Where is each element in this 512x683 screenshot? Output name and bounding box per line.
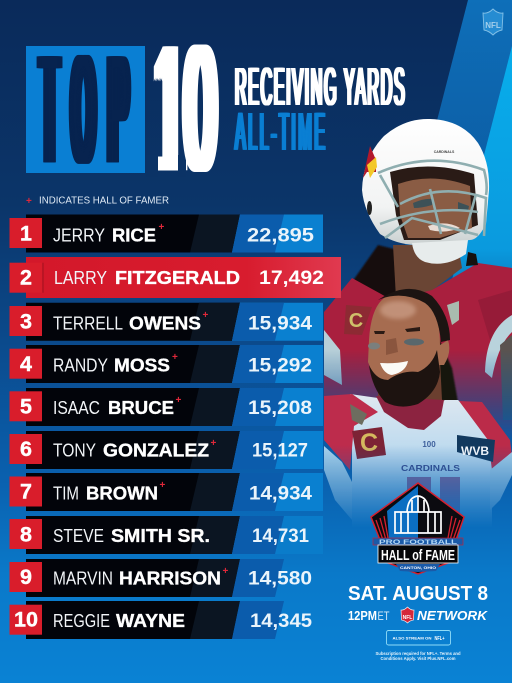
row 8: Steve Smith Sr.: SMITH SR.	[111, 525, 210, 546]
WVB patch	[457, 435, 495, 462]
hair right	[466, 252, 478, 266]
row 9: Marvin Harrison	[10, 559, 312, 597]
row 2: Larry Fitzgerald highlight: 17,492	[259, 268, 324, 289]
row 1: Jerry Rice: 1	[20, 222, 32, 246]
right sleeve	[485, 315, 512, 378]
heading: Receiving Yards: RECEIVING YARDS	[234, 57, 406, 117]
captain C patch	[352, 427, 386, 459]
row 5: Isaac Bruce: +	[176, 395, 182, 406]
jersey number	[407, 477, 460, 520]
row 8: Steve Smith Sr.: 8	[20, 522, 32, 546]
row 10: Reggie Wayne: 14,345	[250, 611, 312, 632]
logo building	[395, 496, 441, 533]
eye black	[413, 199, 433, 208]
shoulder patch	[350, 404, 367, 425]
row 1: Jerry Rice: +	[158, 222, 164, 233]
streaming badge: NFL+	[434, 636, 445, 642]
row 10: Reggie Wayne	[10, 601, 312, 639]
face	[368, 296, 450, 380]
helmet shell	[362, 119, 489, 245]
row 2: Larry Fitzgerald highlight: 2	[20, 266, 32, 290]
row 4: Randy Moss	[10, 345, 323, 383]
title box: TOP	[26, 46, 144, 173]
row 7: Tim Brown: TIM	[53, 482, 79, 503]
row 5: Isaac Bruce: ISAAC	[53, 397, 100, 418]
row 6: Tony Gonzalez: GONZALEZ	[103, 440, 209, 461]
disclaimer: Conditions Apply. Visit Plus.NFL.com	[380, 656, 456, 661]
captain C patch: C	[360, 429, 378, 457]
game time: 12PM	[348, 608, 377, 623]
icon: NFL shield: NFL	[485, 21, 501, 30]
row 1: Jerry Rice: 22,895	[247, 226, 314, 247]
row 5: Isaac Bruce: 5	[20, 394, 32, 418]
neck	[378, 365, 442, 400]
icon: NFL Network shield	[401, 607, 414, 623]
collar	[376, 396, 444, 430]
row 4: Randy Moss: +	[172, 352, 178, 363]
forehead highlight	[380, 301, 416, 319]
left sleeve	[324, 446, 352, 520]
icon: NFL Network shield: NFL	[403, 615, 412, 621]
logo: Pro Football Hall of Fame: PRO FOOTBALL	[379, 540, 458, 546]
hall of famer legend: +	[26, 196, 32, 207]
row 6: Tony Gonzalez	[10, 431, 323, 469]
hall of famer legend: INDICATES HALL OF FAMER	[39, 194, 169, 206]
right shoulder	[459, 401, 512, 470]
logo: canton ohio	[396, 564, 440, 572]
row 6: Tony Gonzalez: +	[210, 438, 216, 449]
hair top	[378, 289, 450, 342]
row 4: Randy Moss: 15,292	[248, 356, 312, 377]
row 7: Tim Brown: 14,934	[249, 483, 312, 504]
heading: All-Time: ALL-TIME	[235, 101, 327, 162]
WVB patch: WVB	[461, 444, 489, 458]
row 7: Tim Brown: 7	[20, 480, 32, 504]
eyes	[374, 327, 420, 334]
row 10: Reggie Wayne: REGGIE	[53, 610, 110, 631]
row 9: Marvin Harrison: HARRISON	[119, 567, 221, 588]
row 3: Terrell Owens: TERRELL	[53, 312, 123, 333]
row 9: Marvin Harrison: 9	[20, 565, 32, 589]
row 1: Jerry Rice: JERRY	[53, 225, 105, 246]
row 2: Larry Fitzgerald highlight: LARRY	[54, 267, 107, 288]
row 4: Randy Moss: 4	[20, 352, 32, 376]
helmet label: CARDINALS	[434, 150, 455, 154]
row 7: Tim Brown	[10, 473, 323, 511]
row 6: Tony Gonzalez: 6	[20, 437, 32, 461]
row 3: Terrell Owens: +	[202, 310, 208, 321]
row 4: Randy Moss: RANDY	[53, 355, 108, 376]
game date: SAT. AUGUST 8	[348, 583, 488, 605]
network wordmark: NETWORK	[417, 608, 489, 623]
row 3: Terrell Owens: OWENS	[129, 312, 201, 333]
right arm	[500, 335, 512, 420]
row 10: Reggie Wayne: 10	[14, 608, 38, 632]
row 3: Terrell Owens: 3	[20, 310, 32, 334]
row 1: Jerry Rice	[10, 214, 323, 252]
row 9: Marvin Harrison: MARVIN	[53, 567, 113, 588]
jersey	[324, 263, 512, 440]
row 2: Larry Fitzgerald highlight: FITZGERALD	[115, 267, 240, 288]
chin guard	[412, 240, 468, 264]
logo: hall of fame box	[378, 545, 458, 563]
streaming badge	[386, 630, 450, 645]
row 7: Tim Brown: +	[160, 480, 166, 491]
hair dreads	[354, 244, 396, 296]
title number: 10: 0	[185, 8, 216, 210]
shoulder C patch: C	[349, 310, 363, 332]
row 5: Isaac Bruce: 15,208	[248, 398, 312, 419]
left sleeve	[324, 330, 342, 385]
row 9: Marvin Harrison: 14,580	[248, 568, 312, 589]
row 7: Tim Brown: BROWN	[86, 482, 158, 503]
diagonal band: light blue	[416, 46, 512, 420]
smile	[380, 361, 408, 375]
row 8: Steve Smith Sr.: STEVE	[53, 525, 104, 546]
facemask	[378, 161, 487, 238]
row 6: Tony Gonzalez: TONY	[53, 440, 96, 461]
shoulder patch	[447, 301, 459, 325]
logo shield	[371, 483, 464, 574]
jersey body	[350, 394, 492, 522]
photo: player in helmet	[324, 119, 512, 440]
diagonal band: mid blue	[360, 0, 512, 420]
100 patch: 100	[422, 440, 436, 449]
title number: 10: 1	[154, 8, 185, 210]
title number: 10	[154, 8, 219, 210]
logo: Pro Football Hall of Fame	[371, 483, 464, 574]
logo: pro football band	[373, 538, 463, 545]
neck	[393, 245, 462, 292]
row 5: Isaac Bruce	[10, 388, 323, 426]
game time: ET	[378, 609, 390, 623]
disclaimer: Subscription required for NFL+. Terms and	[376, 651, 461, 656]
row 1: Jerry Rice: RICE	[112, 225, 156, 246]
row 10: Reggie Wayne: WAYNE	[116, 610, 185, 631]
icon: NFL shield	[483, 9, 503, 35]
row 3: Terrell Owens: 15,934	[248, 313, 312, 334]
nose shadow	[386, 338, 398, 355]
row 2: Larry Fitzgerald highlight	[10, 257, 341, 298]
logo rays	[376, 516, 460, 540]
title word: TOP: TOP	[41, 24, 143, 196]
beard	[369, 350, 440, 407]
row 9: Marvin Harrison: +	[222, 566, 228, 577]
face	[390, 166, 478, 240]
jersey wordmark: CARDINALS	[401, 463, 460, 473]
row 6: Tony Gonzalez: 15,127	[252, 441, 308, 462]
photo: smiling player	[324, 289, 512, 540]
logo: Pro Football Hall of Fame: CANTON, OHIO	[400, 565, 436, 570]
right sleeve	[492, 452, 512, 508]
cardinal logo	[363, 146, 377, 178]
hair back	[440, 339, 459, 400]
row 5: Isaac Bruce: BRUCE	[108, 397, 174, 418]
mouth	[428, 223, 460, 232]
disclaimer	[376, 651, 461, 661]
streaming badge: ALSO STREAM ON	[392, 636, 432, 640]
row 4: Randy Moss: MOSS	[114, 355, 170, 376]
row 8: Steve Smith Sr.: 14,731	[252, 526, 309, 547]
left shoulder	[324, 394, 378, 470]
row 8: Steve Smith Sr.	[10, 516, 323, 554]
eye black	[404, 338, 424, 346]
helmet ear hole	[367, 201, 372, 215]
shoulder shadow	[478, 290, 512, 340]
shoulder C patch	[344, 305, 372, 335]
row 3: Terrell Owens	[10, 303, 323, 341]
logo: Pro Football Hall of Fame: HALL of FAME	[381, 547, 455, 564]
